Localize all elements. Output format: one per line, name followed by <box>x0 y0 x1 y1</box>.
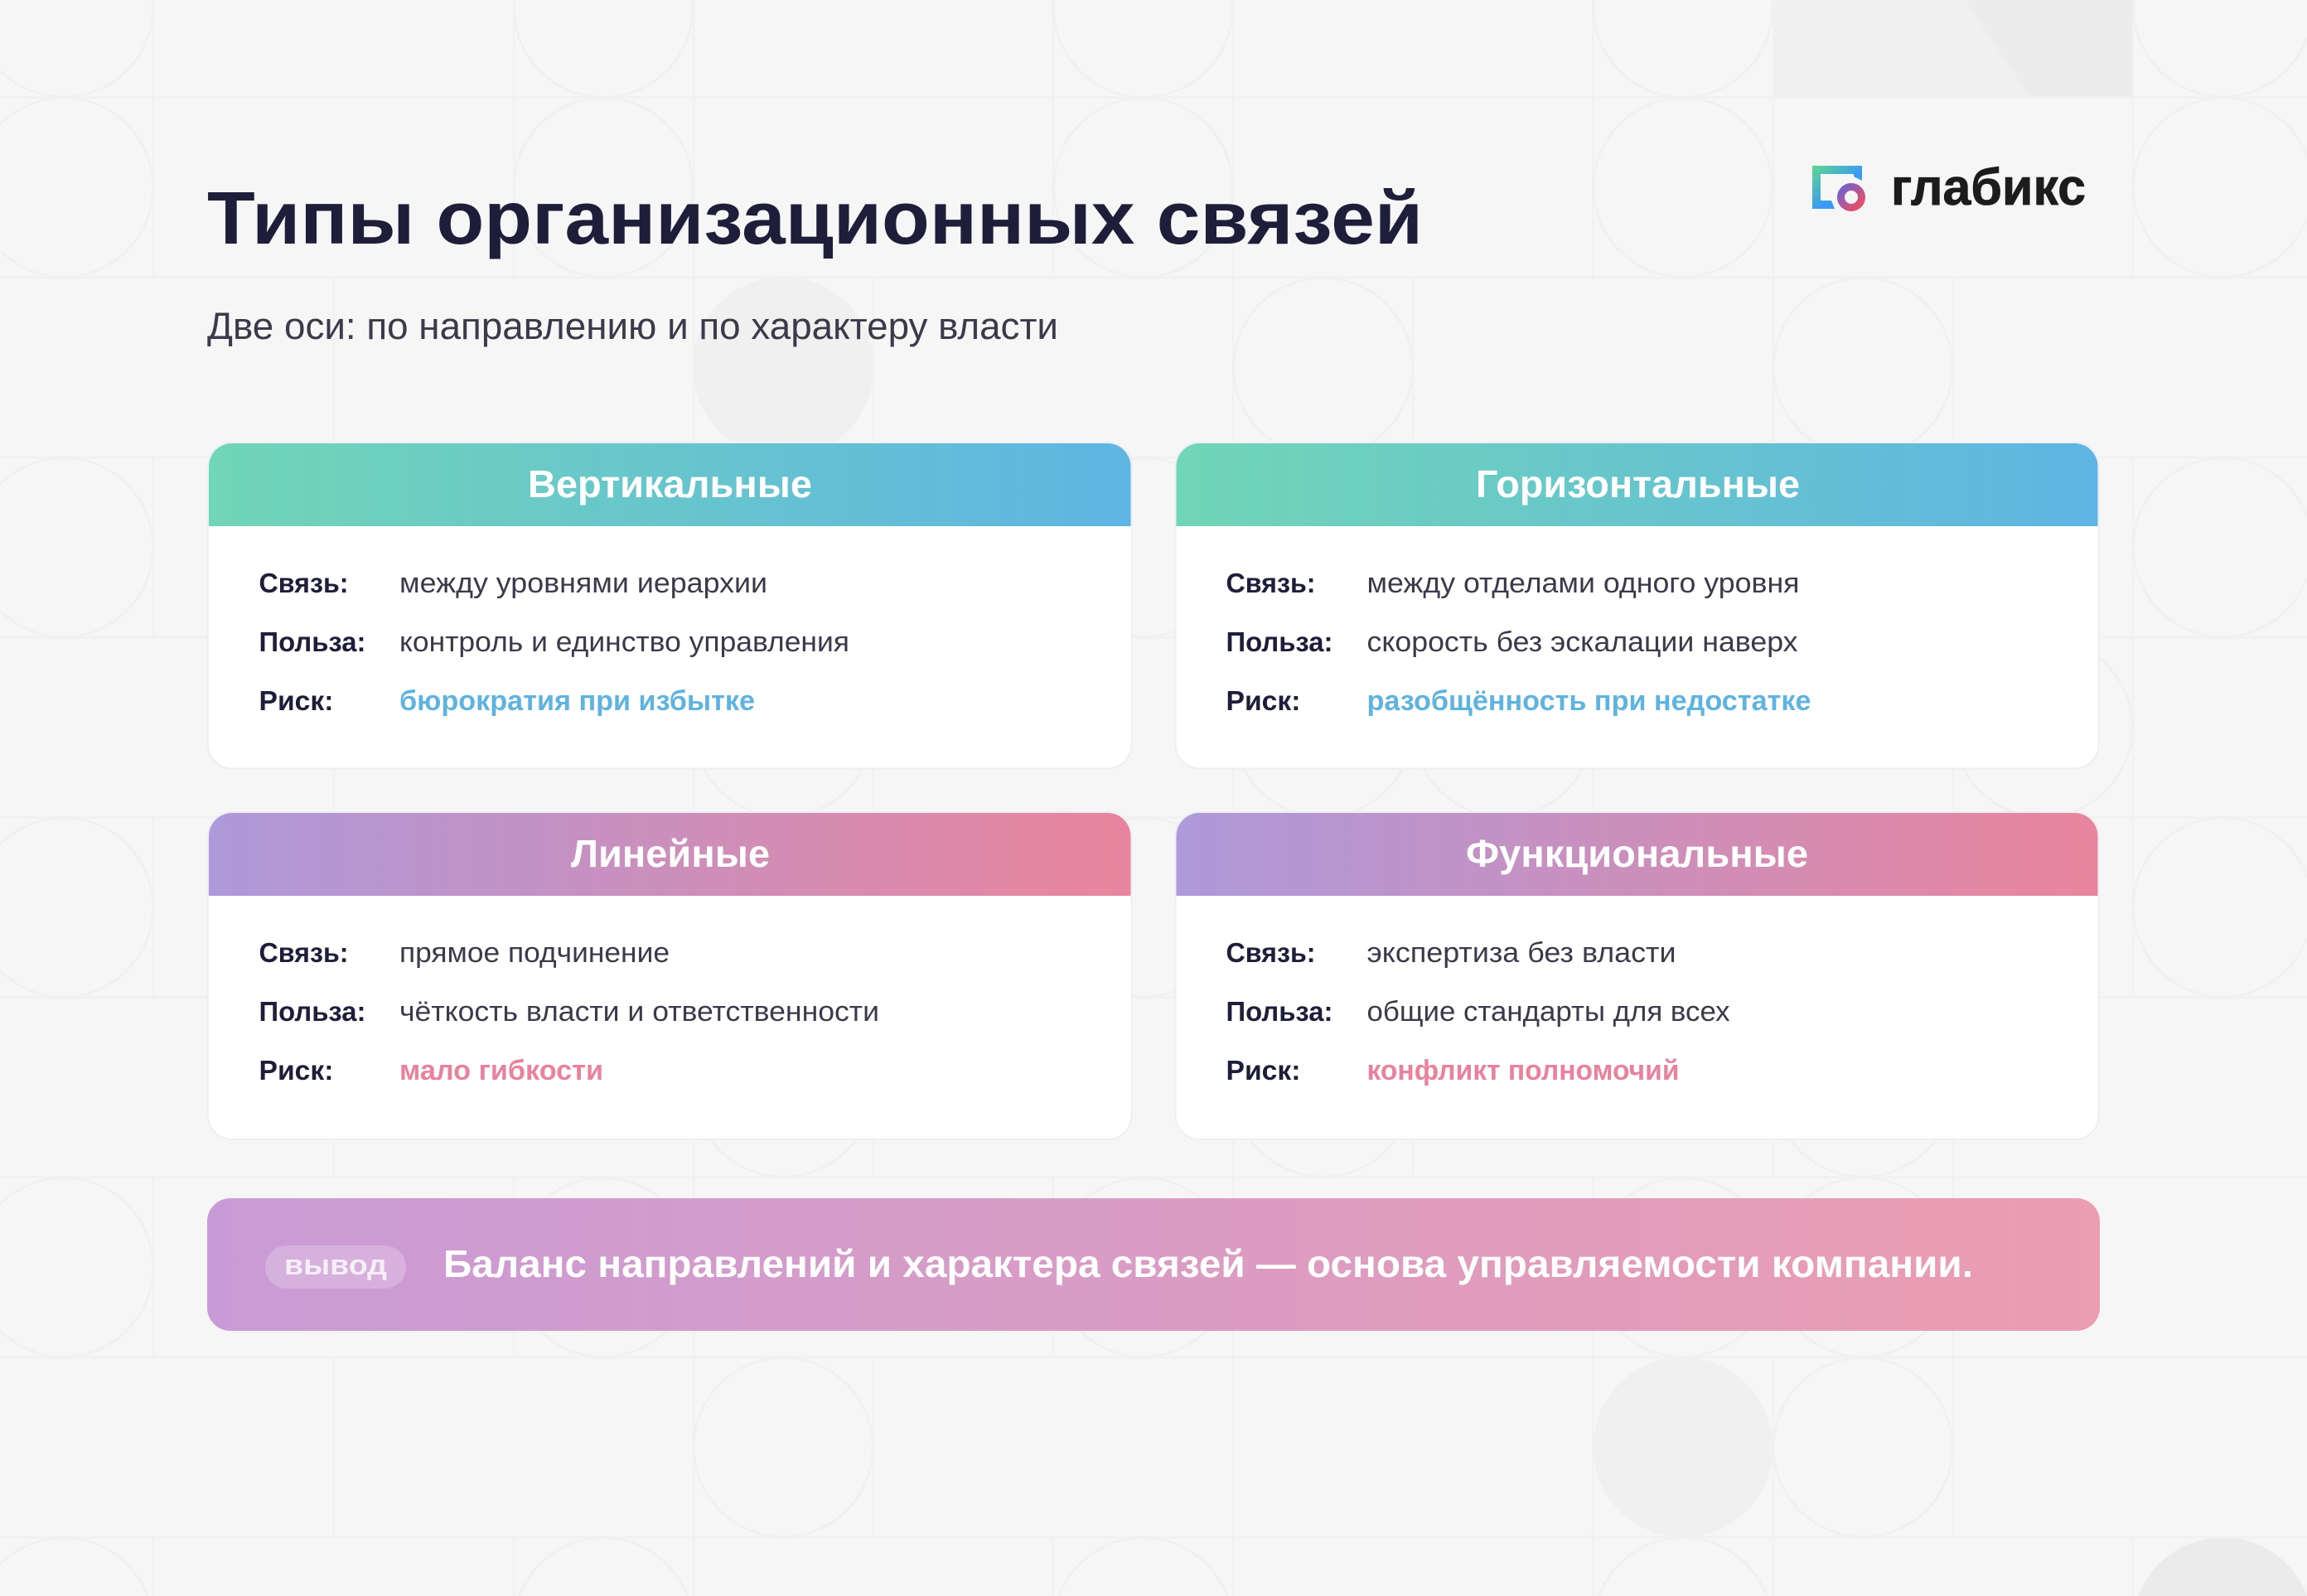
badge: conclusion: вывод <box>284 1250 387 1281</box>
subtitle: Две оси: по направлению и по характеру власти <box>207 305 1058 347</box>
row: risk <box>1226 1055 1679 1086</box>
row: link: между отделами одного уровня <box>1367 568 1800 599</box>
panel header: horizontal <box>1177 443 2098 526</box>
panel: horizontal links <box>1175 443 2098 769</box>
row: link: между уровнями иерархии <box>399 568 767 599</box>
heading: line: Линейные <box>571 832 770 875</box>
row: link: экспертиза без власти <box>1367 937 1676 969</box>
row: benefit: Польза: <box>259 626 366 657</box>
heading: vertical: Вертикальные <box>528 462 812 505</box>
row: link: Связь: <box>1226 568 1316 598</box>
row: link <box>259 568 767 599</box>
row: risk: бюрократия при избытке <box>399 685 755 717</box>
panel header: line <box>209 813 1130 896</box>
row: link: Связь: <box>259 937 348 968</box>
row: benefit: Польза: <box>1226 626 1332 657</box>
row: link: прямое подчинение <box>399 937 670 969</box>
panel: functional links <box>1175 812 2098 1139</box>
row: link: Связь: <box>259 568 348 598</box>
row: risk: Риск: <box>1226 1055 1301 1086</box>
row: risk: мало гибкости <box>399 1055 603 1086</box>
row: benefit: общие стандарты для всех <box>1367 996 1730 1028</box>
row: benefit: чёткость власти и ответственности <box>399 996 879 1028</box>
row: link: Связь: <box>1226 937 1316 968</box>
logo: glabiks <box>1812 159 2086 216</box>
row: risk: разобщённость при недостатке <box>1367 685 1811 717</box>
row: risk: Риск: <box>259 685 333 716</box>
callout: conclusion banner <box>207 1198 2100 1331</box>
panel header: functional <box>1177 813 2098 896</box>
heading: horizontal: Горизонтальные <box>1476 462 1800 505</box>
row: benefit: контроль и единство управления <box>399 626 849 658</box>
panel: line links <box>208 812 1132 1139</box>
logo wordmark: глабикс <box>1891 159 2086 216</box>
title: Типы организационных связей <box>207 177 1423 260</box>
row: benefit: Польза: <box>1226 996 1332 1027</box>
row: risk: Риск: <box>259 1055 333 1086</box>
row: link <box>1226 937 1676 969</box>
panel header: vertical <box>209 443 1130 526</box>
row: link <box>259 937 670 969</box>
row: risk: конфликт полномочий <box>1367 1055 1679 1086</box>
row: benefit: Польза: <box>259 996 366 1027</box>
badge: conclusion <box>265 1245 406 1289</box>
conclusion text: Баланс направлений и характера связей — основа управляемости компании. <box>443 1242 1973 1285</box>
row: benefit: скорость без эскалации наверх <box>1367 626 1798 658</box>
row: risk: Риск: <box>1226 685 1301 716</box>
panel: vertical links <box>208 443 1132 769</box>
row: risk <box>259 1055 603 1086</box>
heading: functional: Функциональные <box>1466 832 1808 875</box>
icon: logo mark <box>1812 166 1862 209</box>
